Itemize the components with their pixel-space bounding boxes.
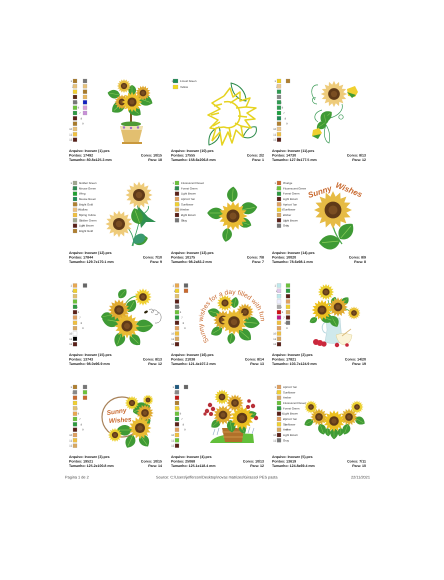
file details: Para: 12: [148, 362, 162, 366]
sunny wishes wreath: Sunny: [106, 407, 127, 417]
file details: Tamanho: 78.6x98.1 mm: [272, 260, 313, 264]
sunflower basket: [203, 389, 258, 443]
file details: Tamanho: 158.6x206.8 mm: [171, 158, 216, 162]
thread swatches: Forest Green: [283, 406, 300, 410]
file details: Pontos: 17821: [272, 358, 296, 362]
file details: [171, 251, 264, 264]
thread swatches: Light Brown: [283, 197, 298, 201]
file details: Para: 1: [252, 158, 264, 162]
panel: inovare (16): [171, 283, 264, 366]
file details: [272, 353, 366, 366]
file details: Pontos: 25068: [171, 460, 195, 464]
thread swatches: 123456789: [70, 80, 84, 126]
page footer: 22/11/2021: [351, 476, 370, 480]
thread swatches: Apricot Tan: [283, 385, 297, 389]
thread swatches: [274, 181, 307, 228]
thread swatches: Meuse Green: [79, 186, 96, 190]
thread swatches: Forest Green: [181, 186, 198, 190]
thread swatches: Orange: [283, 181, 293, 185]
thread swatches: 123456789: [172, 386, 186, 432]
thread swatches: 123456789: [274, 386, 288, 432]
file details: Cores: 8/14: [245, 358, 264, 362]
sunflower jug: [308, 284, 361, 347]
thread swatches: Light Brown: [79, 224, 94, 228]
file details: Cores: 10/15: [141, 154, 162, 158]
two sunflowers: [105, 181, 156, 247]
thread swatches: Sunflower: [283, 422, 296, 426]
file details: [171, 455, 264, 468]
panel: inovare (15): [69, 284, 162, 366]
file details: [69, 251, 162, 264]
thread swatches: Amber: [283, 396, 291, 400]
thread swatches: Light Brown: [283, 218, 298, 222]
sunny wishes sunflower: Sunny: [307, 184, 333, 200]
thread swatches: Fluorescent Green: [283, 401, 307, 405]
sunflower with four leaves: [207, 186, 258, 243]
file details: Para: 7: [252, 260, 264, 264]
thread swatches: [171, 385, 188, 448]
sunny wishes sunflower: [307, 181, 364, 250]
thread swatches: 123456789: [70, 386, 84, 432]
file details: Para: 13: [250, 362, 264, 366]
sunflower topiary: [107, 79, 154, 144]
file details: Pontos: 19521: [69, 460, 93, 464]
file details: Arquivo: Inovare (3).pes: [69, 455, 110, 459]
file details: Tamanho: 124.8x69.4 mm: [272, 464, 315, 468]
file details: Tamanho: 98.0x96.9 mm: [69, 362, 110, 366]
thread swatches: [273, 385, 307, 442]
thread swatches: 12345678: [172, 182, 185, 222]
panel: inovare (2): [272, 284, 366, 366]
page footer: Pagina 1 de 2: [65, 476, 89, 480]
thread swatches: 1011: [273, 434, 277, 442]
file details: [69, 455, 162, 468]
file details: Tamanho: 103.7x124.9 mm: [272, 362, 317, 366]
file details: Arquivo: Inovare (4).pes: [171, 455, 212, 459]
file details: Cores: 14/20: [345, 358, 366, 362]
thread swatches: Spring Yellow: [79, 213, 97, 217]
file details: [171, 353, 264, 366]
thread swatches: Sunflower: [283, 390, 296, 394]
file details: Arquivo: Inovare (12).pes: [69, 251, 112, 255]
thread swatches: Fluorescent Green: [181, 181, 205, 185]
thread swatches: Golden Green: [79, 218, 97, 222]
thread swatches: Forest Green: [180, 79, 197, 83]
panel: inovare (5): [272, 385, 367, 468]
thread swatches: 123456789: [274, 182, 288, 228]
file details: Arquivo: Inovare (10).pes: [171, 149, 214, 153]
file details: Pontos: 13619: [272, 460, 296, 464]
panel: inovare (4): [171, 385, 264, 468]
thread swatches: Amber: [283, 428, 291, 432]
thread swatches: 101112: [273, 332, 277, 346]
thread swatches: Yellow: [180, 85, 189, 89]
thread swatches: 101112: [69, 128, 73, 142]
file details: Arquivo: Inovare (14).pes: [272, 251, 315, 255]
file details: Pontos: 10020: [272, 256, 296, 260]
thread swatches: Mallow: [79, 208, 89, 212]
panel: inovare (1): [69, 79, 162, 162]
file details: Cores: 8/13: [347, 154, 366, 158]
thread swatches: [69, 284, 87, 346]
thread swatches: [69, 385, 87, 448]
thread swatches: Light Brown: [283, 412, 298, 416]
file details: Para: 14: [148, 464, 162, 468]
thread swatches: 123456789: [70, 284, 84, 330]
file details: [272, 455, 366, 468]
thread swatches: Meuse Green: [79, 197, 96, 201]
panel: inovare (13): [171, 181, 264, 264]
file details: Para: 12: [352, 158, 366, 162]
thread swatches: Forest Green: [283, 192, 300, 196]
thread swatches: 123456789: [70, 182, 84, 228]
file details: Tamanho: 125.1x118.4 mm: [171, 464, 216, 468]
file details: Cores: 7/10: [143, 256, 162, 260]
file details: [272, 251, 366, 264]
thread swatches: 101112: [171, 434, 175, 448]
thread swatches: Fluorescent Green: [283, 186, 307, 190]
file details: Arquivo: Inovare (11).pes: [272, 149, 314, 153]
sunflower outline: [208, 83, 256, 145]
file details: Pontos: 17492: [69, 154, 93, 158]
thread swatches: [273, 79, 290, 142]
panel: inovare (10): [171, 79, 264, 162]
file details: Tamanho: 121.4x107.2 mm: [171, 362, 216, 366]
file details: Pontos: 17844: [69, 256, 93, 260]
file details: Arquivo: Inovare (15).pes: [69, 353, 112, 357]
page footer: [65, 476, 370, 480]
file details: Tamanho: 80.8x125.3 mm: [69, 158, 112, 162]
thread swatches: [172, 181, 205, 222]
thread swatches: Apricot Tan: [283, 202, 297, 206]
file details: Arquivo: Inovare (1).pes: [69, 149, 110, 153]
page footer: Source: C:\Users\jefferson\Desktop\novas matrizes\Girassol PES pasta: [156, 476, 278, 480]
thread swatches: 12: [172, 80, 175, 89]
file details: Pontos: 14730: [272, 154, 296, 158]
file details: Pontos: 13743: [69, 358, 93, 362]
thread swatches: Wing: [79, 192, 86, 196]
thread swatches: Apricot Tan: [181, 197, 195, 201]
thread swatches: Gray: [181, 218, 188, 222]
file details: Cores: 10/13: [243, 460, 264, 464]
file details: Para: 12: [250, 464, 264, 468]
file details: Pontos: 10175: [171, 256, 195, 260]
thread swatches: [171, 284, 188, 346]
panel: inovare (14): [272, 181, 366, 264]
file details: [69, 353, 162, 366]
thread swatches: Bright Gold: [79, 229, 93, 233]
sunny wishes wreath: [102, 394, 154, 450]
thread swatches: [70, 181, 97, 233]
file details: Tamanho: 98.2x83.2 mm: [171, 260, 212, 264]
thread swatches: 101112: [273, 128, 277, 142]
thread swatches: [273, 284, 290, 346]
panel: inovare (3): [69, 385, 162, 468]
file details: [272, 149, 366, 162]
file details: Para: 8: [354, 260, 366, 264]
file details: Cores: 8/13: [143, 358, 162, 362]
thread swatches: Amber: [283, 213, 291, 217]
thread swatches: Amber: [181, 208, 189, 212]
thread swatches: [69, 79, 87, 142]
sunny wishes sunflower: Wishes: [334, 181, 364, 200]
thread swatches: 123456789: [274, 80, 288, 126]
file details: Arquivo: Inovare (5).pes: [272, 455, 313, 459]
thread swatches: Light Brown: [181, 192, 196, 196]
file details: Cores: 8/9: [349, 256, 366, 260]
panel: inovare (12): [69, 181, 162, 264]
thread swatches: Sunflower: [181, 202, 194, 206]
file details: Cores: 7/8: [247, 256, 264, 260]
sunflowers with bee: [100, 287, 161, 348]
thread swatches: 101112: [171, 332, 175, 346]
thread swatches: Golden Green: [79, 181, 97, 185]
file details: Para: 10: [352, 464, 366, 468]
file details: Arquivo: Inovare (16).pes: [171, 353, 214, 357]
panel: inovare (11): [272, 79, 366, 162]
thread swatches: Sunflower: [283, 208, 296, 212]
file details: Cores: 10/15: [141, 460, 162, 464]
sunflower with curls: [312, 80, 358, 143]
thread swatches: 123456789: [172, 284, 186, 330]
sunflower garland: [303, 400, 367, 439]
thread swatches: Gray: [283, 224, 290, 228]
sunny wishes wreath: Wishes: [109, 416, 132, 425]
file details: Para: 9: [150, 260, 162, 264]
thread swatches: Light Brown: [283, 433, 298, 437]
file details: [171, 149, 264, 162]
file details: Para: 19: [352, 362, 366, 366]
thread swatches: Bright Gold: [79, 202, 93, 206]
file details: Para: 18: [148, 158, 162, 162]
file details: Cores: 2/2: [247, 154, 264, 158]
thread swatches: 123456789: [274, 284, 288, 330]
file details: Cores: 7/11: [347, 460, 366, 464]
thread swatches: Gray: [283, 438, 290, 442]
file details: Tamanho: 125.2x100.8 mm: [69, 464, 114, 468]
file details: Arquivo: Inovare (13).pes: [171, 251, 214, 255]
file details: Tamanho: 129.7x170.1 mm: [69, 260, 114, 264]
file details: Pontos: 21038: [171, 358, 195, 362]
thread swatches: [172, 79, 197, 89]
file details: Pontos: 17555: [171, 154, 195, 158]
thread swatches: Light Brown: [181, 213, 196, 217]
sunflower bouquet with circular text: Sunny wishes for a day filled with fun: [198, 290, 264, 343]
thread swatches: 101112: [69, 332, 73, 346]
thread swatches: Apricot Tan: [283, 417, 297, 421]
thread swatches: 101112: [69, 434, 73, 448]
file details: Tamanho: 127.9x177.5 mm: [272, 158, 317, 162]
file details: Arquivo: Inovare (2).pes: [272, 353, 313, 357]
file details: [69, 149, 162, 162]
